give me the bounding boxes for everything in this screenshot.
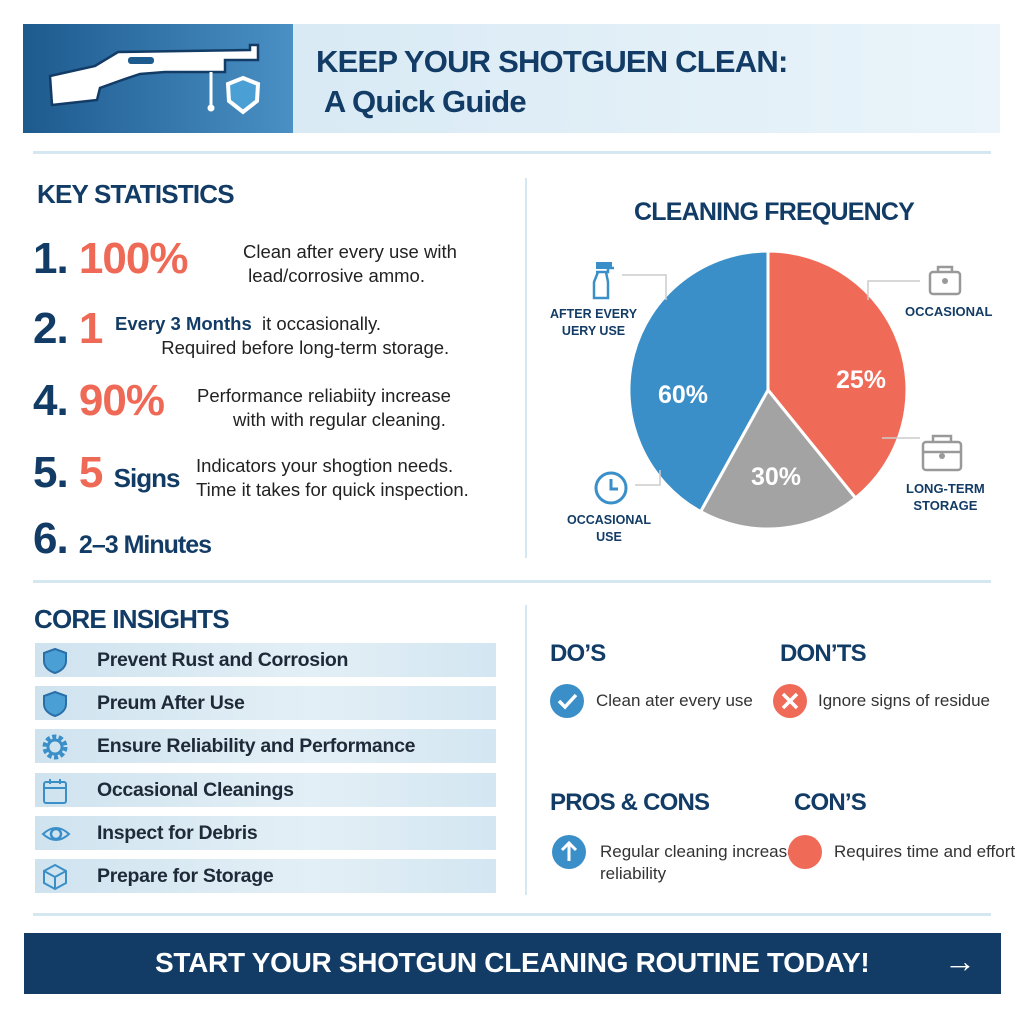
stat 4: with with regular cleaning. xyxy=(233,409,446,430)
title: A Quick Guide xyxy=(324,84,526,119)
row: reliability xyxy=(35,729,496,763)
legend: long-term storage xyxy=(906,434,985,513)
item: con: Requires time and effort xyxy=(834,842,1015,861)
title xyxy=(316,44,787,119)
pie chart xyxy=(622,252,920,528)
stat 5: 5. 5 Signs xyxy=(33,448,179,497)
header banner xyxy=(23,24,1000,133)
stat 2: 2. 1 xyxy=(33,304,102,353)
legend: after every use: UERY USE xyxy=(562,324,625,338)
row: prevent rust xyxy=(35,643,496,677)
stat 2: Required before long-term storage. xyxy=(161,337,449,358)
row: occasional cleanings xyxy=(35,773,496,807)
call to action banner: START YOUR SHOTGUN CLEANING ROUTINE TODAY! xyxy=(155,947,869,978)
icon: shotgun xyxy=(48,44,260,114)
stat 2 xyxy=(33,304,449,358)
stat 6: 6. 2–3 Minutes xyxy=(33,514,211,563)
stat 5 xyxy=(33,448,469,500)
legend: long-term storage: LONG-TERM xyxy=(906,481,985,496)
legend: occasional xyxy=(905,266,992,319)
row: occasional cleanings: Occasional Cleanings xyxy=(97,779,294,801)
legend: occasional use: USE xyxy=(596,530,622,544)
stat 1: 1. 100% xyxy=(33,234,187,283)
stat 4: 4. 90% xyxy=(33,376,164,425)
legend: after every use: AFTER EVERY xyxy=(550,307,637,321)
heading: donts: DON’TS xyxy=(780,640,866,667)
legend: occasional: OCCASIONAL xyxy=(905,304,992,319)
item: dont: Ignore signs of residue xyxy=(818,691,990,710)
stat 1 xyxy=(33,234,457,286)
item: do: Clean ater every use xyxy=(596,691,753,710)
stat 1: lead/corrosive ammo. xyxy=(248,265,425,286)
title: KEEP YOUR SHOTGUEN CLEAN: xyxy=(316,44,787,79)
legend: long-term storage: STORAGE xyxy=(913,498,977,513)
item: dont xyxy=(773,684,990,718)
stat 2: Every 3 Months it occasionally. xyxy=(115,313,381,334)
heading: cons: CON’S xyxy=(794,789,866,816)
heading: key statistics: KEY STATISTICS xyxy=(37,179,234,209)
item: pro: Regular cleaning increases xyxy=(600,842,805,861)
panel: core insights xyxy=(34,604,496,893)
panel: do's and don'ts xyxy=(550,640,1015,883)
legend: occasional use: OCCASIONAL xyxy=(567,513,651,527)
stat 4 xyxy=(33,376,451,430)
row: inspect xyxy=(35,816,496,850)
stat 4: Performance reliabiity increase xyxy=(197,385,451,406)
stat 5: Indicators your shogtion needs. xyxy=(196,455,453,476)
row: storage: Prepare for Storage xyxy=(97,865,273,887)
row: preum after use: Preum After Use xyxy=(97,692,245,714)
row: preum after use xyxy=(35,686,496,720)
row: inspect: Inspect for Debris xyxy=(97,822,257,844)
panel: key statistics xyxy=(33,179,469,563)
stat 1: Clean after every use with xyxy=(243,241,457,262)
item: pro: reliability xyxy=(600,864,666,883)
heading: pros & cons: PROS & CONS xyxy=(550,789,709,816)
row: reliability: Ensure Reliability and Performance xyxy=(97,735,415,757)
pie chart: 30% xyxy=(751,463,801,491)
stat 5: Time it takes for quick inspection. xyxy=(196,479,469,500)
pie chart: 60% xyxy=(658,381,708,409)
row: prevent rust: Prevent Rust and Corrosion xyxy=(97,649,348,671)
header icon panel xyxy=(23,24,293,133)
heading: dos: DO’S xyxy=(550,640,605,667)
item: pro xyxy=(552,835,805,883)
item: con xyxy=(788,835,1015,869)
icon: arrow: → xyxy=(944,943,976,979)
heading: core insights: CORE INSIGHTS xyxy=(34,604,229,634)
insight rows xyxy=(35,643,496,893)
call to action banner xyxy=(24,933,1001,994)
legend: after every use xyxy=(550,262,637,338)
pie chart: 25% xyxy=(836,366,886,394)
legend: occasional use xyxy=(567,472,651,544)
row: storage xyxy=(35,859,496,893)
item: do xyxy=(550,684,753,718)
heading: cleaning frequency: CLEANING FREQUENCY xyxy=(634,198,914,226)
